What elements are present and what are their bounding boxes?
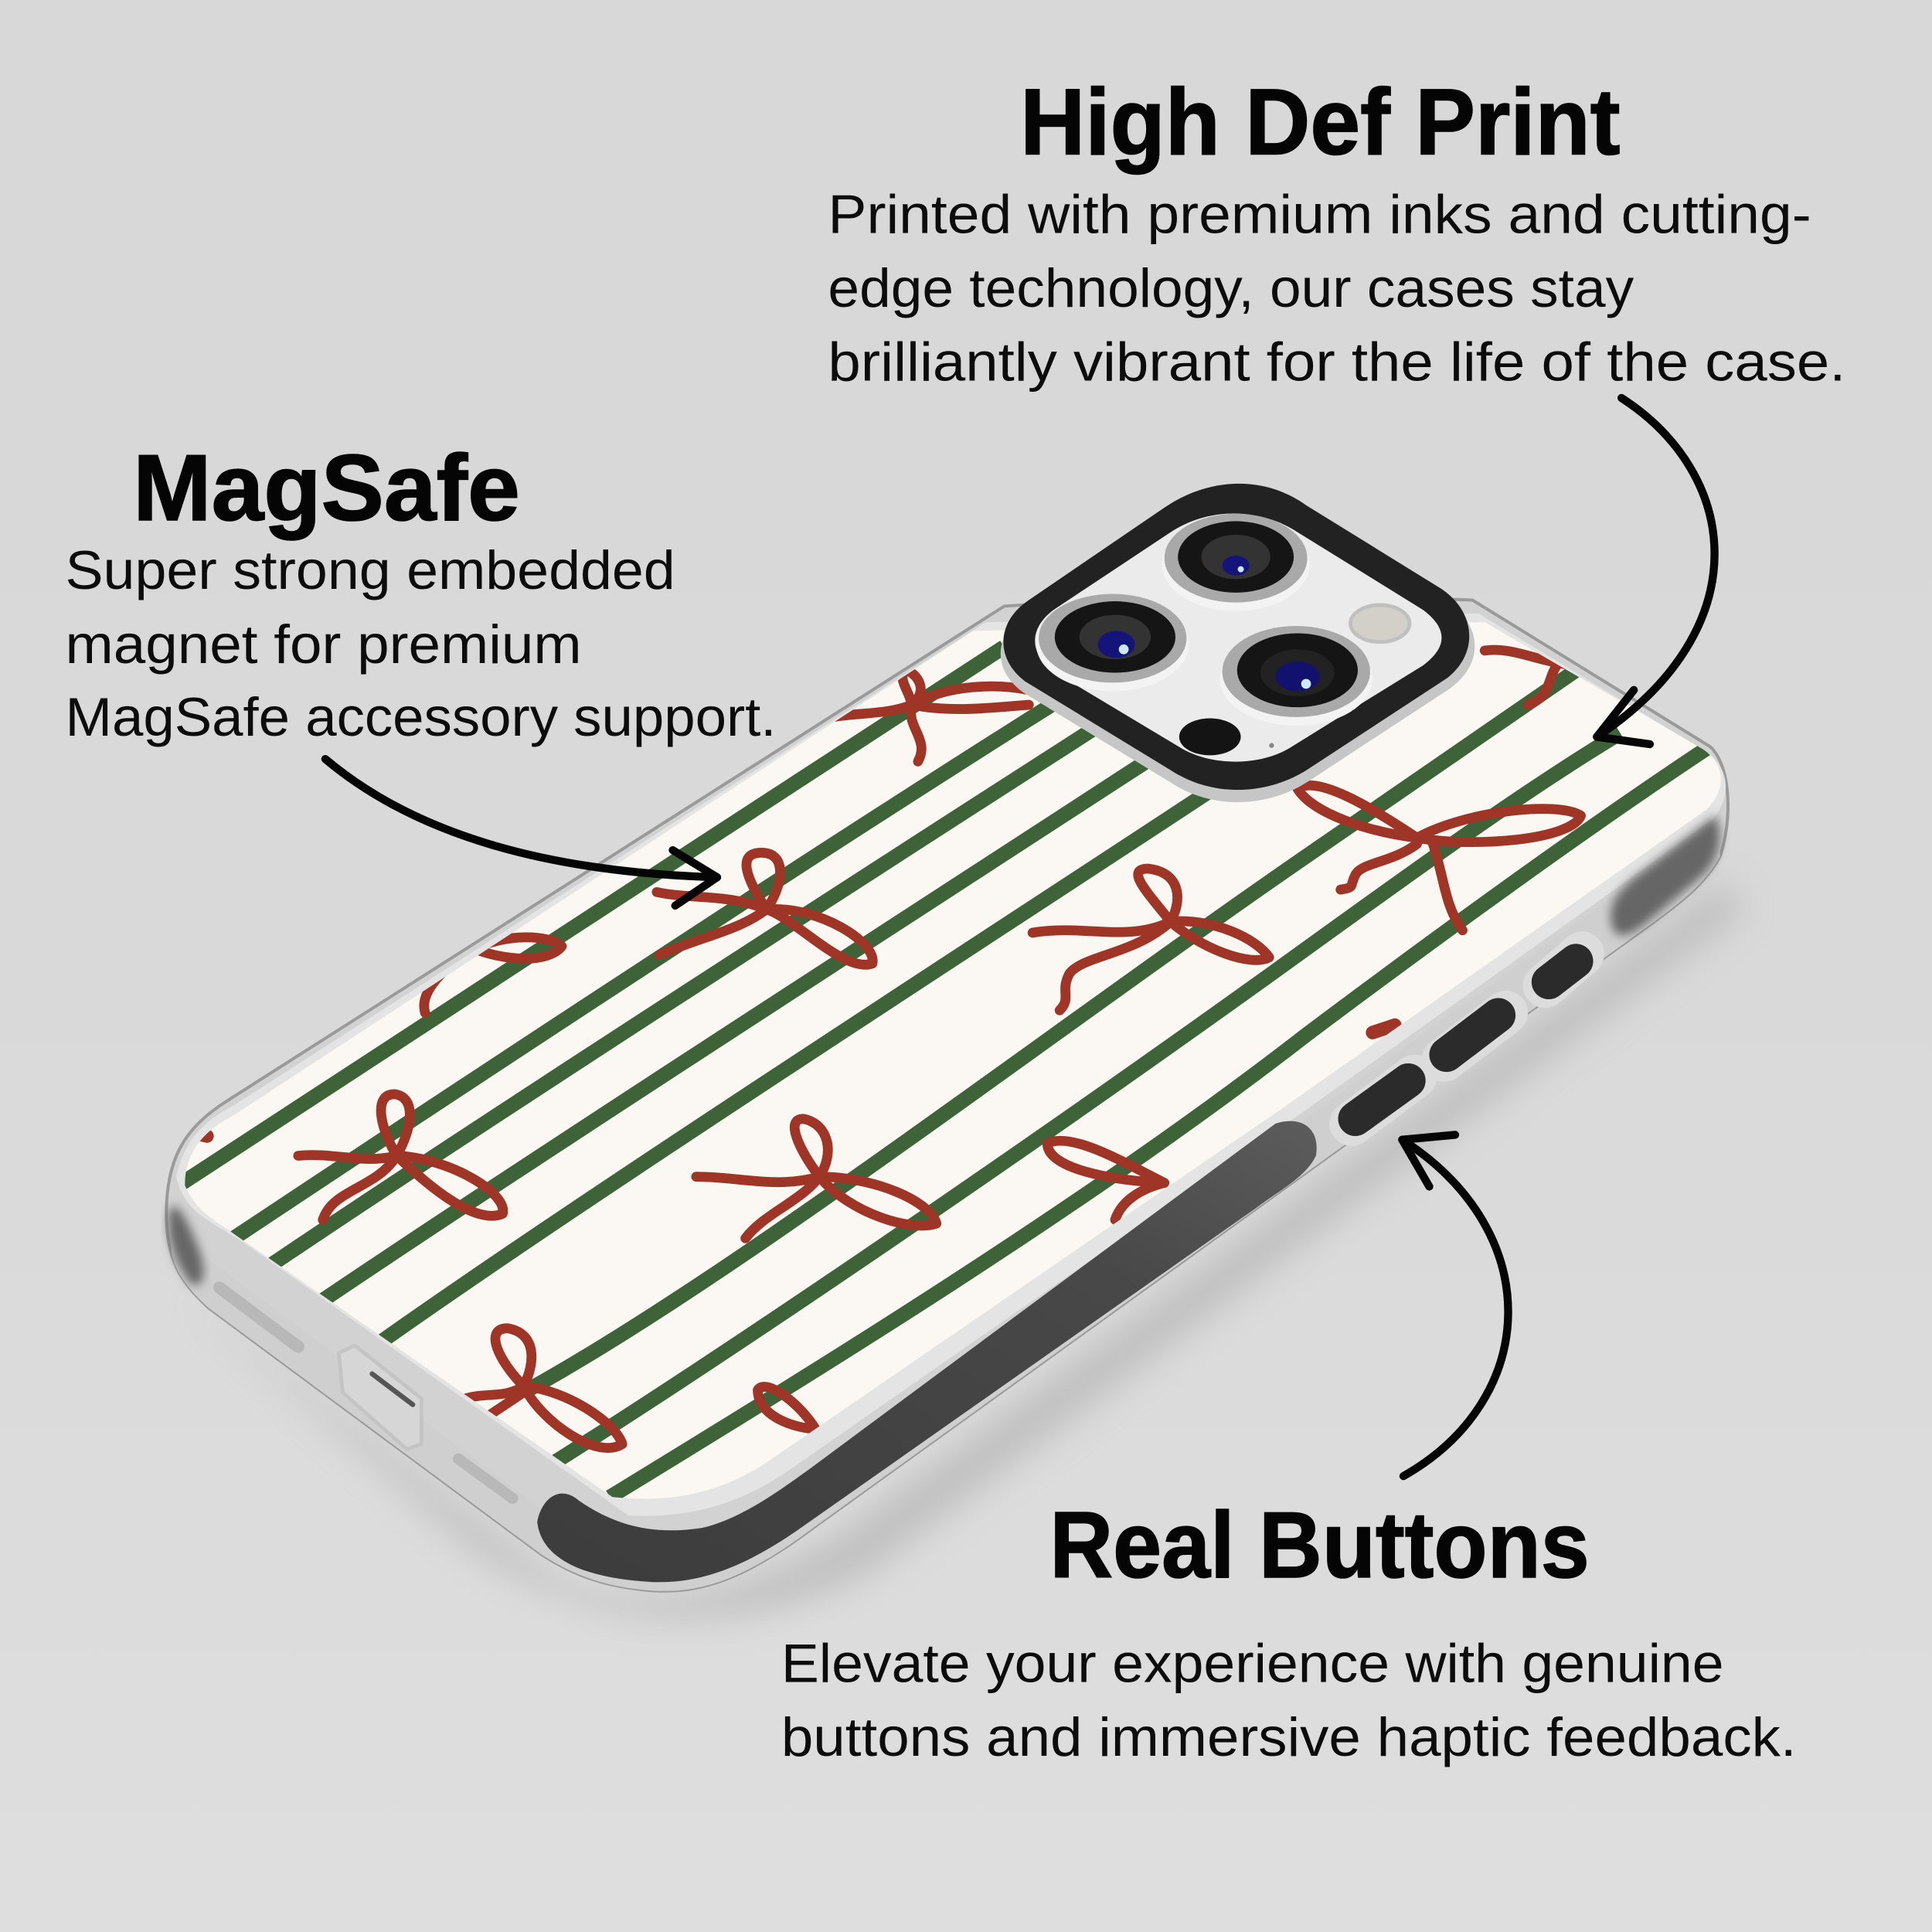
red bows [187, 643, 1614, 1448]
bow: lower left [298, 1094, 503, 1219]
heading: High Def Print [1020, 69, 1621, 174]
green stripes [179, 647, 1715, 1497]
camera island [1001, 484, 1475, 802]
printed case back [185, 622, 1721, 1498]
description: brilliantly vibrant for the life of the case. [828, 332, 1845, 393]
dark bumper section bottom [537, 1121, 1317, 1582]
description: MagSafe accessory support. [66, 686, 776, 747]
button cutouts [1352, 954, 1582, 1124]
bow: partial top right [1479, 645, 1566, 709]
phone case [166, 484, 1728, 1591]
flash [1350, 605, 1410, 642]
bow: middle left [657, 852, 872, 964]
bow: tiny fragments [187, 1026, 1395, 1136]
lens: top [1162, 514, 1310, 611]
bow: bottom [466, 1328, 622, 1448]
rear bumper rim [176, 614, 1726, 1515]
dark bumper section left [168, 1206, 203, 1285]
bow: top row left [832, 669, 1029, 761]
lidar [1179, 719, 1241, 755]
case body [166, 591, 1728, 1591]
description: Super strong embedded [66, 539, 675, 600]
speaker slot right [458, 1459, 512, 1498]
bow: partial loop bottom [758, 1386, 815, 1429]
action button [1355, 1080, 1408, 1119]
arrow: magsafe [325, 759, 717, 906]
power button [1549, 961, 1576, 982]
callout: real buttons [781, 1492, 1797, 1767]
dark bumper section right [1611, 815, 1719, 935]
bow: partial at edge [1047, 1141, 1165, 1219]
speaker slot left [219, 1287, 298, 1347]
description: edge technology, our cases stay [828, 257, 1634, 318]
usb port [372, 1374, 413, 1405]
description [66, 539, 776, 747]
island silver edge [1001, 494, 1475, 802]
bow: middle right [1032, 869, 1269, 1010]
callout: high def print [828, 69, 1845, 393]
usb port surround [338, 1345, 421, 1449]
lens: right [1219, 626, 1372, 726]
description: buttons and immersive haptic feedback. [781, 1706, 1797, 1767]
volume button [1447, 1015, 1498, 1055]
description [828, 183, 1845, 393]
case lower side band [171, 819, 1720, 1591]
phone shadow [185, 881, 1743, 1619]
description: Printed with premium inks and cutting- [828, 183, 1811, 244]
callout: magsafe [66, 435, 776, 747]
bow: large right [1298, 785, 1581, 930]
microphone [1269, 743, 1274, 748]
island black frame [1003, 484, 1469, 790]
arrow: real buttons [1402, 1134, 1509, 1476]
heading: Real Buttons [1049, 1492, 1590, 1597]
island plate [1035, 513, 1441, 762]
description: Elevate your experience with genuine [781, 1632, 1724, 1693]
bow: partial upper left [424, 937, 562, 1013]
bow: lower centre [696, 1119, 937, 1238]
side buttons [1352, 954, 1582, 1124]
heading: MagSafe [133, 435, 520, 540]
lens: left [1036, 594, 1189, 691]
description [781, 1632, 1797, 1767]
arrow: high def print [1597, 398, 1715, 744]
description: magnet for premium [66, 614, 582, 675]
bottom ports [219, 1287, 512, 1498]
